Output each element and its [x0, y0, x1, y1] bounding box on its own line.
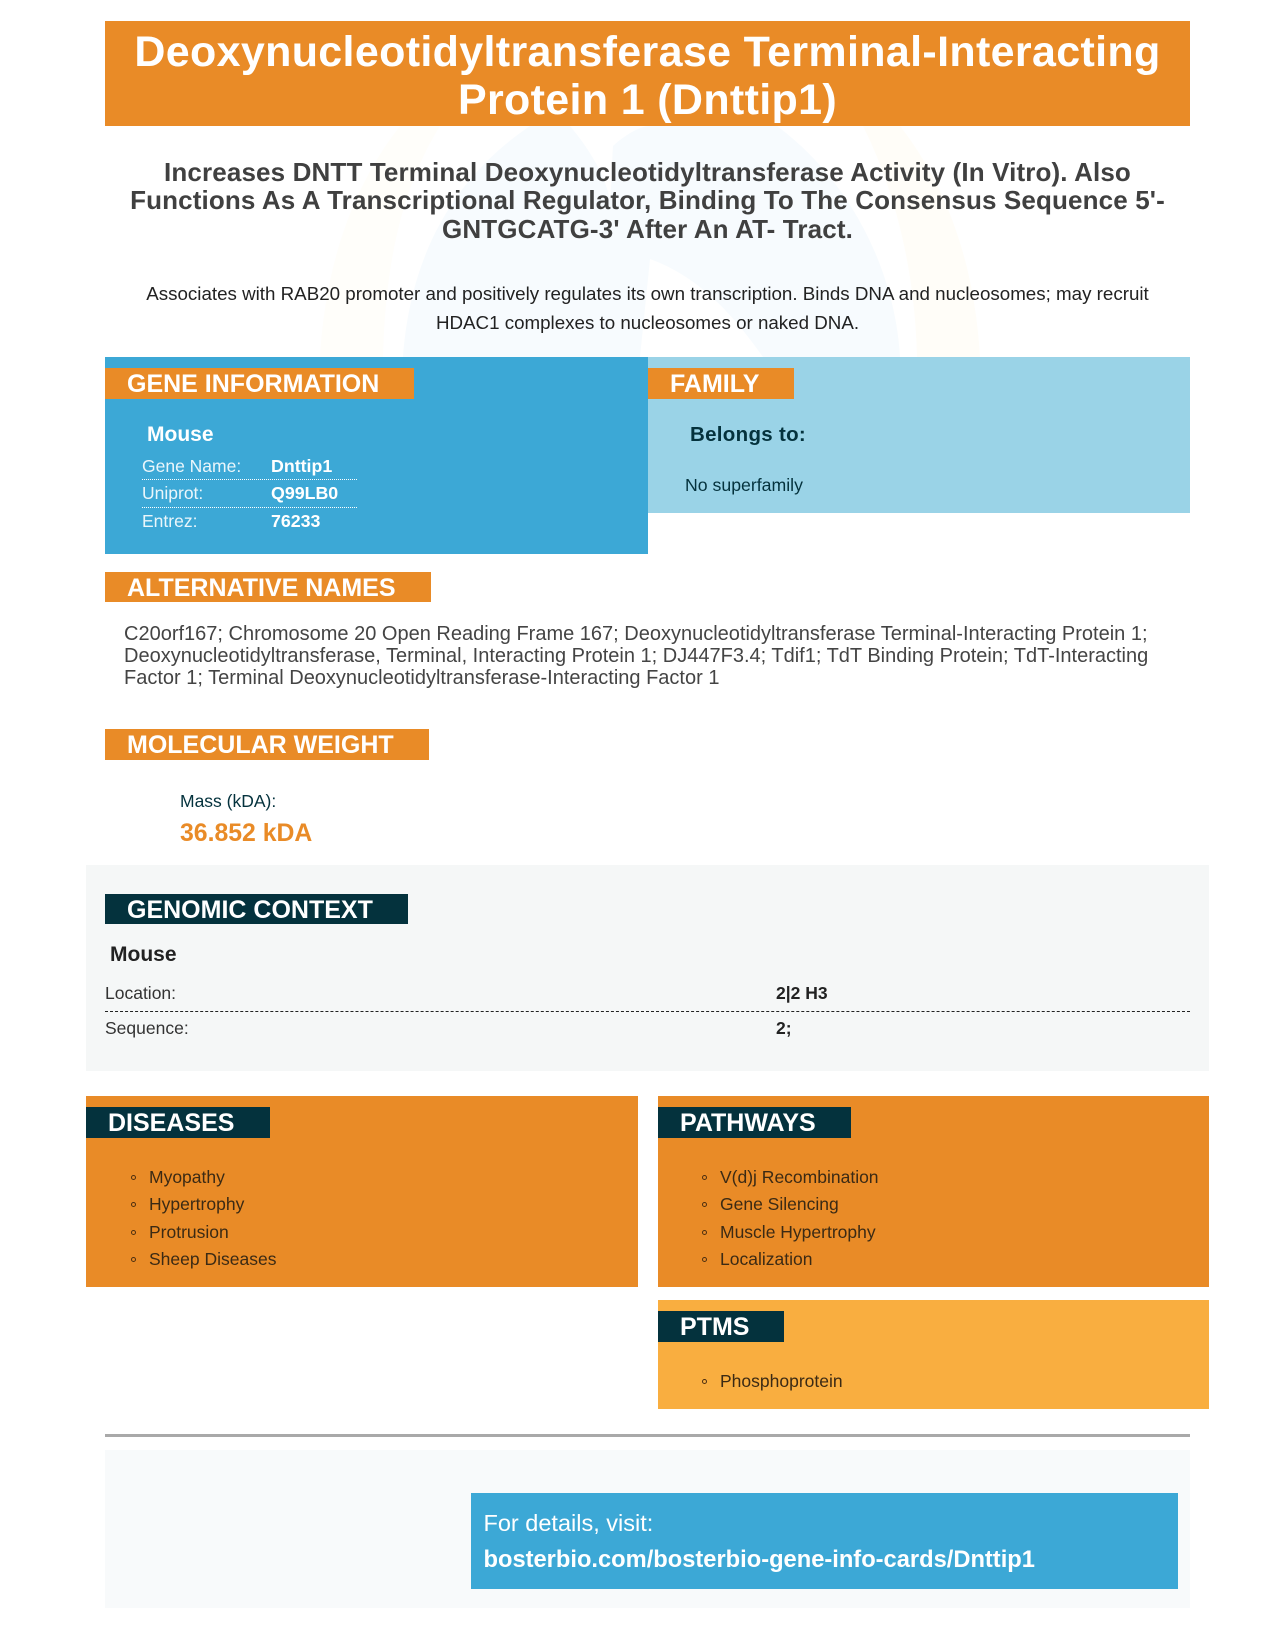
panel: ptms	[658, 1300, 1209, 1409]
gene table: Uniprot:	[142, 483, 203, 503]
title: Protein 1 (Dnttip1)	[458, 76, 837, 124]
pathways list: V(d)j Recombination	[720, 1167, 879, 1187]
gene table: 76233	[271, 511, 320, 531]
alternative names text: C20orf167; Chromosome 20 Open Reading Frame 167; Deoxynucleotidyltransferase Terminal-Interacting Protein 1;	[124, 623, 1148, 645]
details url: bosterbio.com/bosterbio-gene-info-cards/Dnttip1	[484, 1547, 1035, 1573]
title: Deoxynucleotidyltransferase Terminal-Interacting	[134, 28, 1161, 76]
panel: footer	[105, 1450, 1190, 1608]
watermark logo	[0, 0, 1288, 360]
belongs to label: Belongs to:	[690, 423, 806, 446]
heading: molecular weight: MOLECULAR WEIGHT	[127, 731, 394, 759]
panel: genomic context	[86, 865, 1209, 1071]
panel: family	[648, 357, 1190, 513]
sequence row: Sequence:	[105, 1018, 189, 1038]
heading: genomic context: GENOMIC CONTEXT	[127, 896, 373, 924]
species: Mouse	[147, 423, 214, 446]
ptms list: Phosphoprotein	[720, 1371, 843, 1391]
subtitle	[130, 157, 1165, 244]
species: Mouse	[110, 943, 177, 966]
diseases list: Hypertrophy	[149, 1194, 244, 1214]
pathways list: Muscle Hypertrophy	[720, 1222, 876, 1242]
alternative names text: Factor 1; Terminal Deoxynucleotidyltransferase-Interacting Factor 1	[124, 667, 719, 689]
title	[105, 21, 1190, 126]
heading: ptms: PTMS	[680, 1313, 749, 1341]
subtitle: Increases DNTT Terminal Deoxynucleotidyltransferase Activity (In Vitro). Also	[164, 157, 1131, 187]
details label: For details, visit:	[484, 1510, 653, 1536]
diseases list	[131, 1167, 276, 1269]
mass label: Mass (kDA):	[180, 791, 276, 811]
description: Associates with RAB20 promoter and positively regulates its own transcription. Binds DNA and nucleosomes; may recruit	[146, 283, 1149, 304]
panel: gene information	[105, 357, 648, 554]
gene table: Gene Name:	[142, 456, 241, 476]
heading: diseases	[86, 1107, 270, 1138]
heading: family	[648, 368, 794, 399]
sequence row	[105, 1018, 792, 1038]
heading: pathways	[658, 1107, 851, 1138]
sequence row: 2;	[776, 1018, 792, 1038]
location row: 2|2 H3	[776, 983, 828, 1003]
gene table: Dnttip1	[271, 456, 332, 476]
mass value: 36.852 kDA	[180, 820, 312, 847]
diseases list: Myopathy	[149, 1167, 225, 1187]
pathways list: Gene Silencing	[720, 1194, 839, 1214]
description	[146, 283, 1149, 333]
heading: alternative names: ALTERNATIVE NAMES	[127, 574, 396, 602]
subtitle: GNTGCATG-3' After An AT- Tract.	[442, 214, 853, 244]
pathways list: Localization	[720, 1249, 812, 1269]
heading: pathways: PATHWAYS	[680, 1109, 816, 1137]
subtitle: Functions As A Transcriptional Regulator, Binding To The Consensus Sequence 5'-	[130, 185, 1165, 215]
callout: details link	[471, 1493, 1178, 1589]
gene table: Entrez:	[142, 511, 197, 531]
location row	[105, 983, 828, 1003]
gene table: Q99LB0	[271, 483, 338, 503]
heading: ptms	[658, 1311, 784, 1342]
diseases list: Protrusion	[149, 1222, 229, 1242]
panel: diseases	[86, 1096, 638, 1287]
diseases list: Sheep Diseases	[149, 1249, 276, 1269]
heading: gene information: GENE INFORMATION	[127, 370, 379, 398]
panel: pathways	[658, 1096, 1209, 1287]
description: HDAC1 complexes to nucleosomes or naked DNA.	[436, 312, 859, 333]
heading: family: FAMILY	[670, 370, 759, 398]
location row: Location:	[105, 983, 176, 1003]
alternative names text: Deoxynucleotidyltransferase, Terminal, Interacting Protein 1; DJ447F3.4; Tdif1; TdT Binding Protein; TdT-Interacting	[124, 645, 1148, 667]
pathways list	[702, 1167, 879, 1269]
gene table	[142, 456, 357, 531]
family value: No superfamily	[685, 475, 803, 495]
heading: diseases: DISEASES	[108, 1109, 234, 1137]
alternative names text	[124, 623, 1148, 689]
